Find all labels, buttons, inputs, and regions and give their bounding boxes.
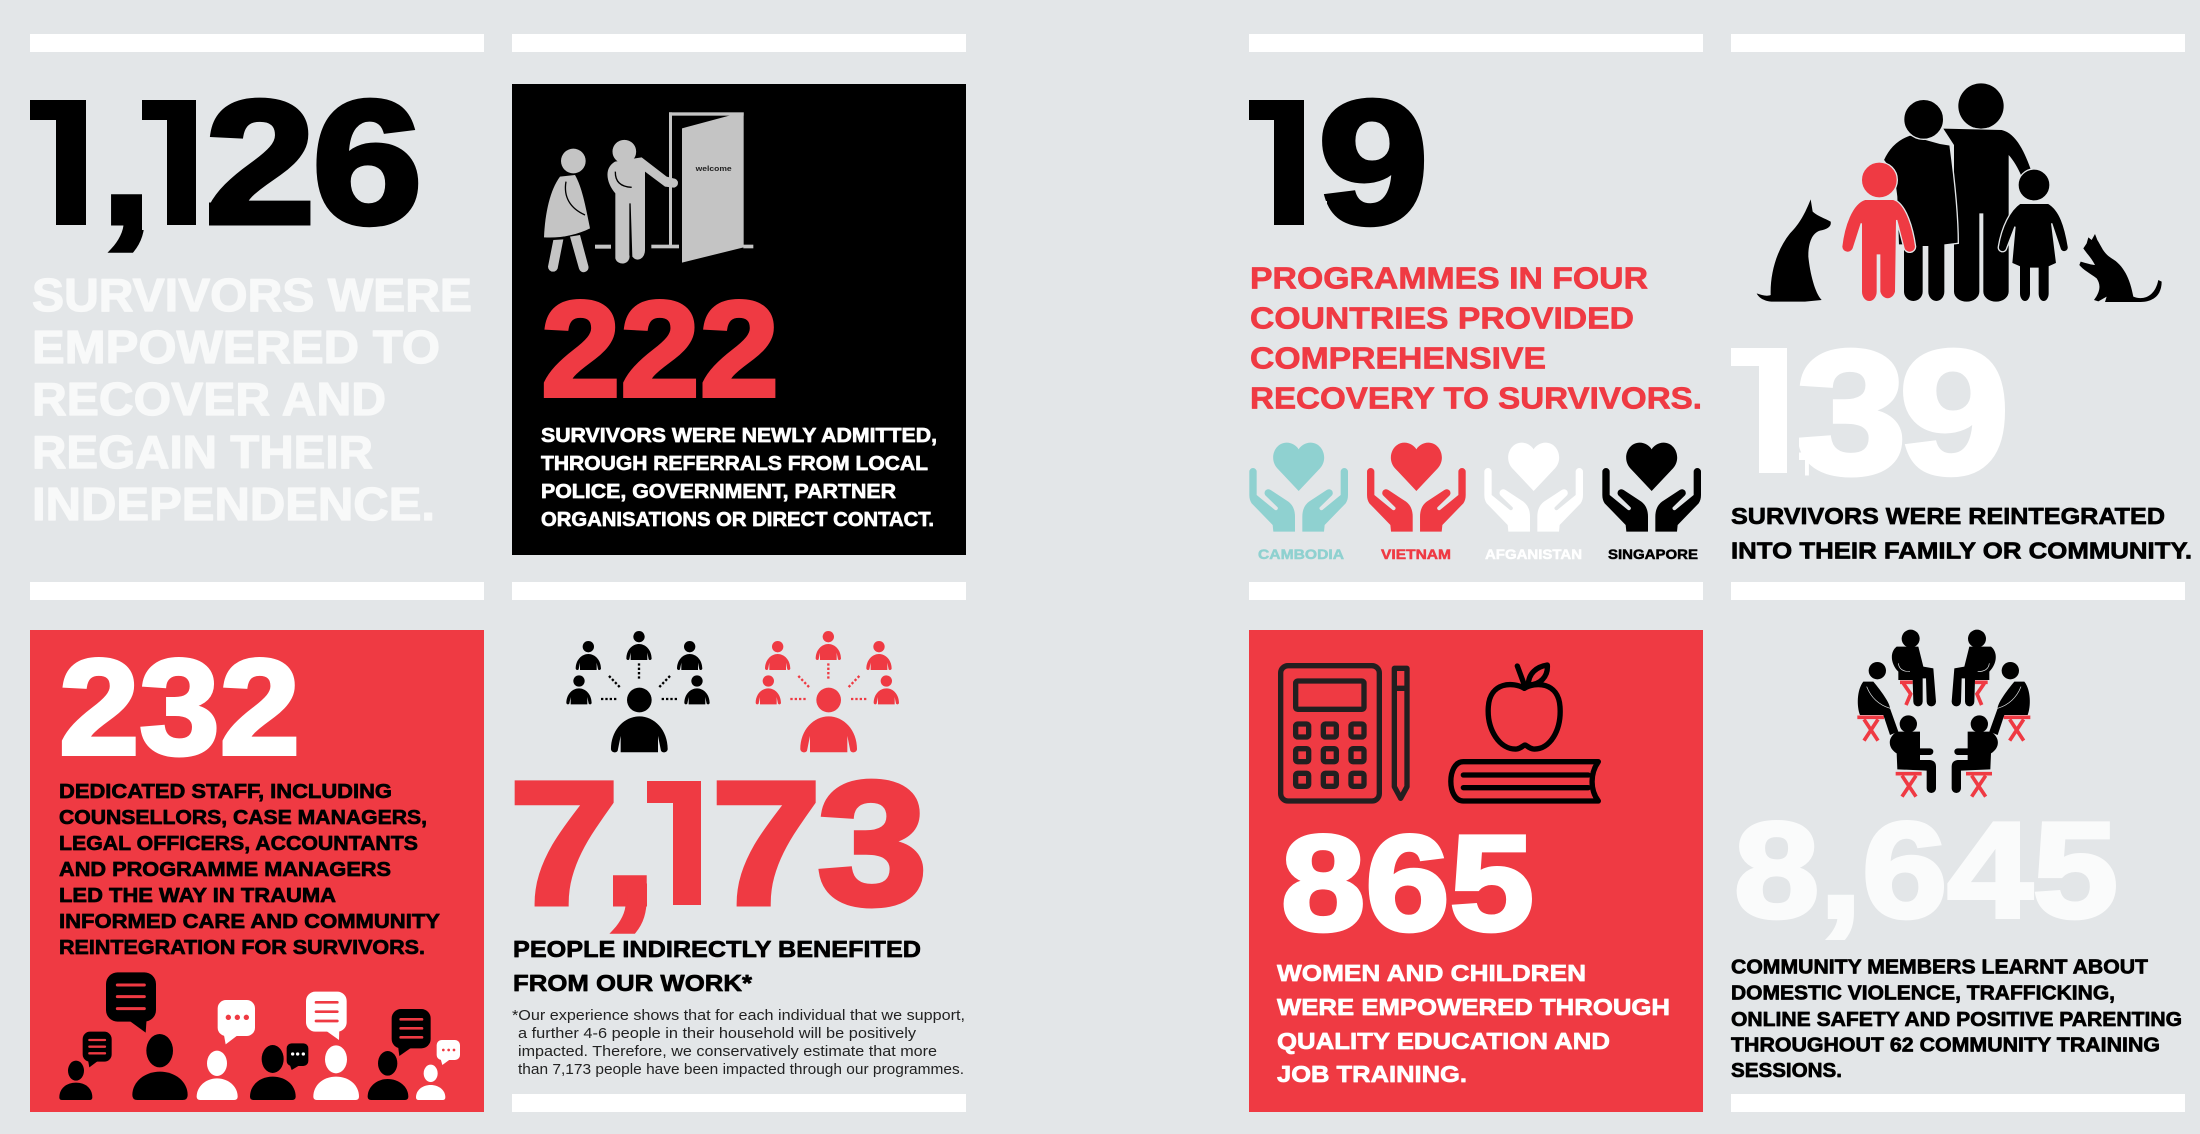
- text: dedicated staff: INFORMED CARE AND COMMUNITY: [59, 911, 441, 933]
- footnote: a further 4-6 people in their household will be positively: [518, 1025, 917, 1042]
- text: dedicated staff: LED THE WAY IN TRAUMA: [59, 885, 336, 907]
- big number 222: 222: [541, 273, 779, 425]
- text: programmes in four countries: [1250, 260, 1702, 416]
- text: reintegrated: [1731, 503, 2192, 564]
- text: dedicated staff: COUNSELLORS, CASE MANAGERS,: [59, 807, 427, 829]
- panel: 1,126 survivors empowered: [0, 64, 472, 530]
- text: survivors empowered: [32, 269, 472, 530]
- big number 1,126: 1,126: [1, 64, 423, 260]
- text: dedicated staff: [59, 781, 441, 959]
- panel: 232 dedicated staff: [30, 630, 484, 1112]
- text: women and children: [1277, 960, 1670, 1087]
- icon: black and red people networks: [566, 631, 899, 752]
- text: women and children: JOB TRAINING.: [1277, 1061, 1467, 1087]
- panel: 139 reintegrated: [1701, 83, 2192, 564]
- country labels: AFGANISTAN: [1485, 546, 1582, 562]
- text: people indirectly benefited: PEOPLE INDIRECTLY BENEFITED: [513, 936, 921, 962]
- text: newly admitted: SURVIVORS WERE NEWLY ADMITTED,: [541, 425, 937, 447]
- text: programmes in four countries: COMPREHENSIVE: [1250, 340, 1546, 376]
- footnote: than 7,173 people have been impacted through our programmes.: [518, 1061, 964, 1078]
- country labels: VIETNAM: [1381, 546, 1451, 562]
- text: survivors empowered: RECOVER AND: [32, 373, 386, 425]
- text: newly admitted: POLICE, GOVERNMENT, PARTNER: [541, 481, 897, 503]
- panel: 8,645 community members: [1731, 630, 2182, 1082]
- icon: people entering welcome door: [544, 112, 753, 272]
- icon: family with dog and cat: [1757, 83, 2162, 302]
- text: community members: COMMUNITY MEMBERS LEARNT ABOUT: [1731, 956, 2148, 978]
- text: people indirectly benefited: [513, 936, 921, 996]
- big number 7,173: 7,173: [509, 745, 928, 941]
- icon: hands with heart, Afganistan: [1484, 443, 1583, 532]
- text: dedicated staff: LEGAL OFFICERS, ACCOUNTANTS: [59, 833, 418, 855]
- text: community members: SESSIONS.: [1731, 1060, 1842, 1082]
- panel: 19 programmes: [1205, 64, 1702, 562]
- icon: hands with heart, Vietnam: [1367, 443, 1466, 532]
- text: community members: DOMESTIC VIOLENCE, TRAFFICKING,: [1731, 982, 2115, 1004]
- icon: hands with heart, Cambodia: [1249, 443, 1348, 532]
- text: newly admitted: ORGANISATIONS OR DIRECT CONTACT.: [541, 509, 934, 531]
- panel: 222 newly admitted: [512, 84, 966, 555]
- icon: seated circle of people: [1857, 630, 2030, 797]
- text: programmes in four countries: RECOVERY TO SURVIVORS.: [1250, 380, 1702, 416]
- text: community members: THROUGHOUT 62 COMMUNITY TRAINING: [1731, 1034, 2160, 1056]
- text: women and children: WOMEN AND CHILDREN: [1277, 960, 1586, 986]
- icon: hands with heart, Singapore: [1602, 443, 1701, 532]
- text: community members: ONLINE SAFETY AND POSITIVE PARENTING: [1731, 1009, 2182, 1031]
- icon: people talking with speech bubbles: [59, 972, 460, 1100]
- text: reintegrated: SURVIVORS WERE REINTEGRATED: [1731, 503, 2165, 529]
- big number 139: 139: [1701, 314, 2010, 510]
- text: community members: [1731, 956, 2182, 1082]
- panel: 7,173 indirectly benefited: [509, 631, 965, 1078]
- text: survivors empowered: SURVIVORS WERE: [32, 269, 472, 321]
- text: newly admitted: THROUGH REFERRALS FROM LOCAL: [541, 453, 928, 475]
- text: survivors empowered: INDEPENDENCE.: [32, 478, 435, 530]
- text: dedicated staff: DEDICATED STAFF, INCLUDING: [59, 781, 392, 803]
- text: dedicated staff: REINTEGRATION FOR SURVIVORS.: [59, 937, 425, 959]
- country labels: [1258, 546, 1698, 562]
- big number 865: 865: [1281, 807, 1534, 959]
- text: women and children: WERE EMPOWERED THROUGH: [1277, 994, 1670, 1020]
- footnote: *Our experience shows that for each individual that we support,: [512, 1007, 965, 1024]
- country labels: SINGAPORE: [1608, 546, 1698, 562]
- big number 232: 232: [59, 631, 300, 783]
- text: survivors empowered: EMPOWERED TO: [32, 321, 440, 373]
- panel: 865 women and children: [1249, 630, 1703, 1112]
- big number 19: 19: [1218, 64, 1429, 260]
- footnote: impacted. Therefore, we conservatively estimate that more: [518, 1043, 937, 1060]
- big number 8,645: 8,645: [1734, 794, 2118, 946]
- icon: calculator, pencil, apple and book: [1281, 665, 1598, 801]
- text: newly admitted: [541, 425, 937, 531]
- text: programmes in four countries: PROGRAMMES IN FOUR: [1250, 260, 1648, 296]
- footnote: [512, 1007, 965, 1078]
- text: women and children: QUALITY EDUCATION AND: [1277, 1028, 1610, 1054]
- country labels: CAMBODIA: [1258, 546, 1344, 562]
- text: programmes in four countries: COUNTRIES PROVIDED: [1250, 300, 1634, 336]
- text: survivors empowered: REGAIN THEIR: [32, 426, 373, 478]
- icon: people entering welcome door: welcome: [695, 164, 732, 173]
- text: reintegrated: INTO THEIR FAMILY OR COMMUNITY.: [1731, 538, 2192, 564]
- text: people indirectly benefited: FROM OUR WORK*: [513, 970, 753, 996]
- text: dedicated staff: AND PROGRAMME MANAGERS: [59, 859, 391, 881]
